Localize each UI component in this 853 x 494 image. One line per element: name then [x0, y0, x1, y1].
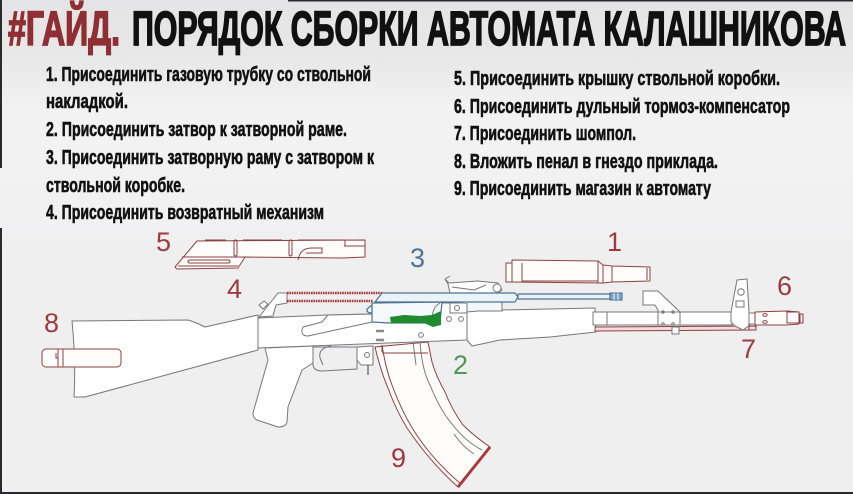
label 9: 9	[391, 443, 406, 473]
barrel	[593, 312, 732, 325]
steps list: left column	[46, 64, 375, 224]
steps list: right column	[454, 68, 790, 200]
label 3: 3	[410, 243, 425, 273]
handguard cover (part 5)	[175, 240, 365, 269]
receiver	[258, 303, 467, 348]
steps list: left column: 3. Присоединить затворную раму с затвором к	[46, 147, 375, 169]
rifle diagram	[42, 276, 803, 487]
label 7: 7	[741, 334, 756, 364]
label 2: 2	[453, 350, 468, 380]
handguard	[467, 308, 596, 346]
label 4: 4	[227, 274, 242, 304]
title	[8, 1, 846, 56]
trigger guard	[313, 346, 373, 375]
label 8: 8	[44, 308, 59, 338]
magazine (part 9)	[375, 342, 490, 487]
gas tube (part 1)	[506, 260, 650, 283]
steps list: left column: накладкой.	[46, 91, 128, 113]
bolt handle slot	[302, 314, 372, 336]
front sight	[731, 279, 756, 330]
steps list: left column: 4. Присоединить возвратный механизм	[46, 202, 324, 224]
steps list: left column: 2. Присоединить затвор к затворной раме.	[46, 119, 347, 141]
steps list: left column: ствольной коробке.	[46, 175, 185, 197]
bolt (part 2)	[390, 311, 441, 327]
steps list: left column: 1. Присоединить газовую трубку со ствольной	[46, 64, 371, 86]
steps list: right column: 7. Присоединить шомпол.	[454, 123, 636, 145]
gas block and rear ramp	[643, 291, 680, 334]
label 5: 5	[156, 227, 171, 257]
pencil case (part 8)	[42, 349, 121, 367]
label 6: 6	[777, 271, 792, 301]
cleaning rod (part 7)	[595, 326, 756, 331]
receiver cover rear	[259, 293, 287, 317]
muzzle brake (part 6)	[749, 311, 803, 325]
steps list: right column: 9. Присоединить магазин к автомату	[454, 178, 712, 200]
title hashtag: #ГАЙД.	[8, 1, 120, 56]
bolt carrier (part 3)	[367, 293, 622, 340]
label 1: 1	[607, 227, 622, 257]
rear sight	[445, 276, 502, 293]
pistol grip	[253, 346, 313, 427]
stock	[72, 315, 258, 397]
steps list: right column: 8. Вложить пенал в гнездо приклада.	[454, 151, 718, 173]
return spring (part 4)	[287, 293, 383, 301]
